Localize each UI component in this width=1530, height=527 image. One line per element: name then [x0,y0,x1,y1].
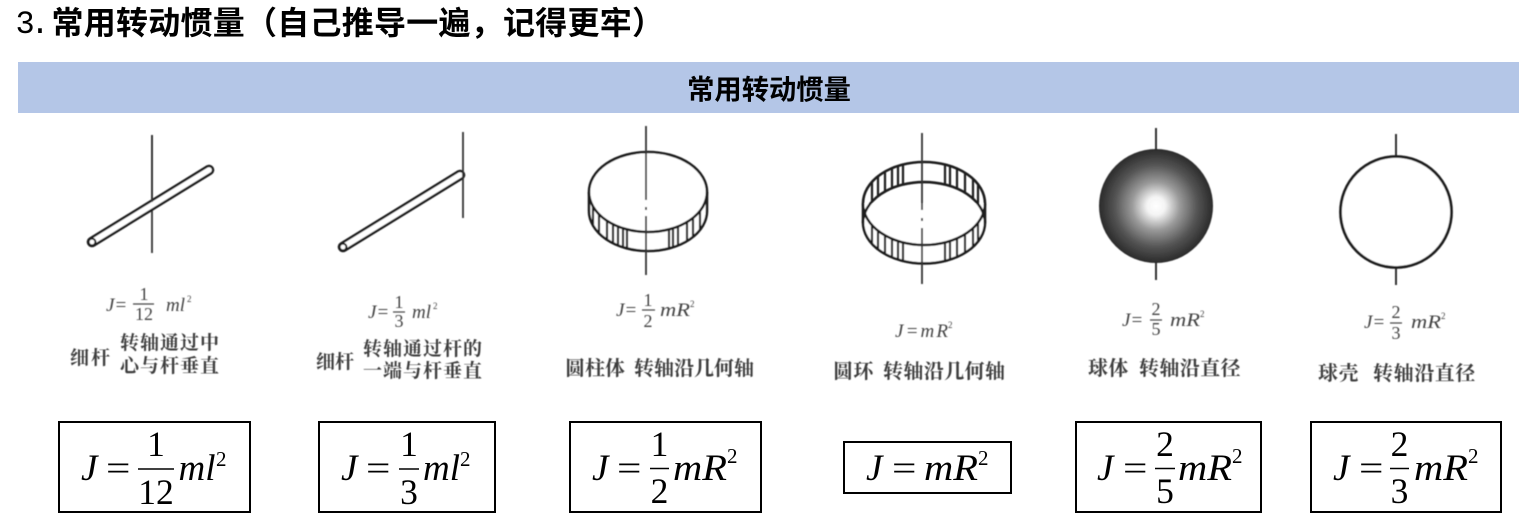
formula box 5: = [1123,449,1147,488]
book formula: ml [412,302,431,323]
icon: rod with end axis [340,132,463,250]
formula box 4: 2 [978,446,988,470]
column 3: cylinder [565,126,754,380]
formula box 1 [59,422,250,512]
icon: ring with axis [863,133,985,284]
formula box 1: 1 [147,424,165,464]
caption: 球壳 [1318,361,1359,385]
formula box 4: mR [924,448,978,489]
column 1: thin rod through centre [70,135,219,377]
caption: 转轴沿几何轴 [634,357,754,380]
formula box 3 [570,422,761,512]
formula box 3: mR [673,448,727,489]
caption: 转轴沿直径 [1139,357,1242,380]
column 4: ring [833,133,1005,383]
book formula: J= [368,302,389,323]
book formula: 2 [1152,299,1160,319]
formula box 5: 2 [1156,424,1174,464]
formula box 6: mR [1414,448,1468,489]
caption: 圆环 [833,360,875,383]
book formula: J= [616,300,637,321]
book formula: 3 [1392,323,1400,343]
title: 3 [16,6,35,43]
caption: 细杆 [70,347,110,369]
book formula: ml [166,295,185,316]
table header band [18,62,1519,113]
column 2: thin rod through end [316,132,482,382]
formula box 2: J [341,448,359,489]
book formula: 2 [690,299,694,309]
book formula: J=mR [895,321,948,342]
formula box 4: = [892,449,916,488]
formula box 6: J [1333,448,1351,489]
caption: 球体 [1088,357,1129,380]
column 5: solid sphere [1088,128,1242,380]
table header band: 常用转动惯量 [687,74,851,105]
title: 常用转动惯量（自己推导一遍，记得更牢） [52,5,664,41]
icon: hollow sphere with axis [1340,134,1452,285]
icon: shaded sphere with axis [1099,128,1213,280]
formula box 5 [1076,422,1261,512]
formula box 5: 2 [1232,444,1242,468]
book formula: 2 [644,311,652,331]
caption: 转轴通过中 [120,332,219,354]
book formula: 2 [433,301,438,311]
formula box 2: 2 [460,447,470,471]
book formula: J= [1122,310,1143,331]
formula box 5: J [1097,448,1115,489]
book formula [106,284,192,324]
book formula [616,290,694,331]
caption: 一端与杆垂直 [363,360,482,382]
book formula: J= [1364,312,1385,333]
formula box 6: = [1359,449,1383,488]
book formula [1364,302,1446,343]
icon: cylinder with axis [589,126,707,275]
book formula: mR [1170,310,1200,331]
book formula [1122,299,1204,339]
caption: 心与杆垂直 [120,355,219,377]
caption [70,332,219,377]
formula box 1: = [106,449,130,488]
book formula: 1 [394,292,404,312]
caption [316,338,482,382]
book formula: 5 [1152,319,1160,339]
book formula: mR [660,300,690,321]
book formula: 2 [1392,302,1400,322]
book formula: J= [106,295,127,316]
formula box 2: 1 [400,424,418,464]
caption: 圆柱体 [565,357,625,380]
formula box 6: 2 [1468,444,1478,468]
formula box 1: J [81,448,99,489]
title: . [30,6,50,43]
caption: 转轴通过杆的 [363,338,482,360]
formula box 5: mR [1178,448,1232,489]
book formula: 2 [1200,309,1204,319]
formula box 6 [1311,422,1501,512]
formula box 5: 5 [1156,471,1174,511]
book formula [368,292,438,331]
formula box 1: 12 [138,472,174,512]
book formula: 1 [140,284,148,304]
formula box 1: ml [178,448,216,489]
column 6: spherical shell [1318,134,1476,385]
formula box 4 [844,442,1011,493]
caption: 转轴沿几何轴 [883,360,1005,383]
icon: rod with central axis [89,135,209,253]
formula box 3: 2 [727,444,738,468]
formula box 1: 2 [216,447,226,471]
formula box 2 [319,422,495,512]
formula box 2: ml [423,448,460,489]
book formula: 12 [135,304,153,324]
book formula: 2 [948,320,952,330]
formula box 3: = [617,449,641,488]
book formula: mR [1411,312,1441,333]
formula box 3: 1 [651,424,668,464]
formula box 3: 2 [651,471,668,511]
formula box 3: J [592,448,610,489]
formula box 4: J [866,448,884,489]
formula box 2: = [366,449,390,488]
book formula: 3 [394,311,404,331]
formula box 6: 3 [1391,471,1408,511]
caption: 细杆 [316,351,354,373]
book formula: 1 [644,290,652,310]
formula box 2: 3 [400,472,418,512]
caption: 转轴沿直径 [1373,362,1476,385]
book formula: 2 [1441,311,1446,321]
book formula: 2 [187,294,192,304]
formula box 6: 2 [1391,424,1408,464]
